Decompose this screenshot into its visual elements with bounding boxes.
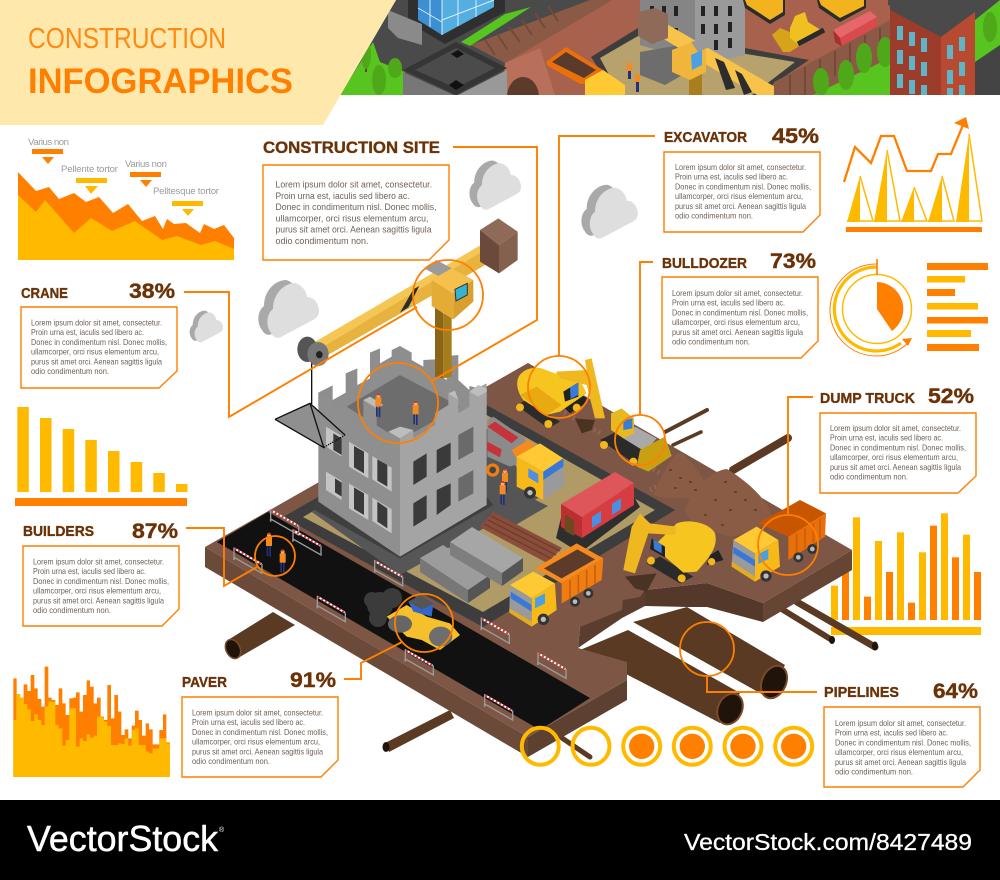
panel: crane: odio condimentum non. [31, 367, 109, 376]
panel: bulldozer [662, 250, 818, 358]
area chart top left: Varius non [28, 137, 69, 148]
panel: builders: Proin urna est, iaculis sed libero ac. [33, 567, 146, 576]
road [217, 512, 590, 730]
header banner [0, 0, 396, 125]
area chart top left: Pelltesque tortor [153, 186, 220, 197]
barricades [234, 509, 566, 720]
panel: paver: Proin urna est, iaculis sed libero ac. [192, 718, 305, 727]
panel: construction site: CONSTRUCTION SITE [263, 139, 440, 157]
footer bar: ® [219, 826, 225, 834]
isometric construction site [205, 218, 878, 757]
target rings row [522, 728, 812, 765]
panel: construction site: ullamcorper, orci risus elementum arcu, [276, 213, 428, 224]
panel: pipelines: Proin urna est, iaculis sed libero ac. [835, 729, 948, 738]
leader lines and highlight circles [184, 136, 818, 692]
panel: dump truck: Lorem ipsum dolor sit amet, consectetur. [830, 424, 961, 433]
panel: bulldozer: Donec in condimentum nisl. Donec mollis, [672, 308, 808, 317]
site ground [283, 395, 675, 627]
panel: dump truck: ullamcorper, orci risus elementum arcu, [830, 453, 958, 462]
panel: excavator: Donec in condimentum nisl. Donec mollis, [675, 182, 811, 191]
cloud 1 [258, 280, 319, 338]
panel: builders: Donec in condimentum nisl. Donec mollis, [33, 577, 169, 586]
concrete slabs and pipes stack [420, 512, 562, 603]
title: CONSTRUCTION [28, 23, 226, 55]
panel: pipelines [824, 680, 980, 787]
panel: bulldozer: purus sit amet orci. Aenean sagittis ligula [672, 328, 803, 337]
mixer truck [486, 417, 565, 505]
panel: paver [182, 669, 338, 777]
panel: paver: ullamcorper, orci risus elementum arcu, [192, 738, 320, 747]
footer bar: VectorStock [27, 818, 219, 859]
dump truck loaded [509, 543, 603, 627]
panel: excavator: purus sit amet orci. Aenean sagittis ligula [675, 202, 806, 211]
cloud 2 [190, 311, 223, 342]
panel: construction site: Lorem ipsum dolor sit amet, consectetur. [276, 180, 432, 190]
radial gauge chart [830, 259, 912, 356]
platform sides [205, 547, 852, 757]
soil mounds [653, 453, 773, 536]
panel: paver: odio condimentum non. [192, 757, 270, 766]
dump truck empty [732, 500, 826, 582]
panel: construction site: Donec in condimentum nisl. Donec mollis, [276, 202, 436, 213]
building [312, 346, 493, 558]
red site cabin [556, 472, 640, 553]
panel: excavator: EXCAVATOR [664, 130, 747, 146]
panel: crane [21, 280, 177, 388]
panel: excavator: 45% [772, 125, 819, 148]
bar chart descending [15, 407, 188, 506]
panel: builders: Lorem ipsum dolor sit amet, consectetur. [33, 558, 164, 566]
panel: dump truck: odio condimentum non. [830, 472, 908, 482]
panel: crane: Proin urna est, iaculis sed libero ac. [31, 328, 144, 337]
panel: excavator: Lorem ipsum dolor sit amet, consectetur. [675, 163, 806, 172]
panel: dump truck: 52% [928, 385, 974, 408]
platform top [205, 363, 852, 737]
pipes behind platform [222, 410, 878, 757]
panel: bulldozer: Lorem ipsum dolor sit amet, consectetur. [672, 289, 803, 298]
horizontal bars [927, 263, 988, 351]
panel: crane: Donec in condimentum nisl. Donec mollis, [31, 338, 167, 347]
panel: bulldozer: 73% [770, 250, 816, 273]
panel: bulldozer: Proin urna est, iaculis sed libero ac. [672, 299, 785, 308]
panel: bulldozer: BULLDOZER [662, 256, 747, 272]
panel: builders: ullamcorper, orci risus elementum arcu, [33, 587, 161, 596]
cloud 4 [581, 185, 638, 239]
area chart top left: Varius non [125, 159, 167, 170]
excavator 2 [623, 513, 723, 592]
panel: construction site: odio condimentum non. [276, 236, 368, 247]
panel: paver: 91% [290, 669, 336, 692]
cloud 3 [469, 161, 521, 210]
title: INFOGRAPHICS [28, 62, 293, 101]
panel: pipelines: purus sit amet orci. Aenean sagittis ligula [835, 758, 966, 767]
panel: paver: purus sit amet orci. Aenean sagittis ligula [192, 747, 323, 756]
area chart top left: Pellente tortor [61, 164, 119, 175]
footer bar [0, 800, 1000, 880]
panel: builders: 87% [132, 520, 178, 543]
line and peaks chart top right [844, 117, 982, 232]
panel: excavator [664, 125, 820, 232]
area chart top left [18, 137, 234, 260]
paver roller [266, 533, 460, 650]
footer bar: VectorStock.com/8427489 [684, 829, 972, 855]
panel: excavator: odio condimentum non. [675, 212, 753, 220]
crane [275, 218, 518, 448]
panel: pipelines: PIPELINES [824, 685, 899, 701]
panel: paver: PAVER [182, 675, 227, 691]
panel: dump truck: Donec in condimentum nisl. Donec mollis, [830, 443, 966, 452]
panel: dump truck: purus sit amet orci. Aenean sagittis ligula [830, 463, 961, 472]
header scene: isometric city [340, 0, 1000, 95]
panel: builders [23, 520, 179, 626]
panel: builders: BUILDERS [23, 524, 94, 540]
panel: pipelines: 64% [933, 680, 978, 703]
road smoke [364, 588, 402, 627]
panel: pipelines: Donec in condimentum nisl. Donec mollis, [835, 738, 971, 747]
panel: excavator: ullamcorper, orci risus elementum arcu, [675, 192, 803, 201]
title [28, 23, 293, 101]
panel: excavator: Proin urna est, iaculis sed libero ac. [675, 173, 788, 182]
panel: bulldozer: ullamcorper, orci risus elementum arcu, [672, 318, 800, 327]
panel: builders: purus sit amet orci. Aenean sagittis ligula [33, 596, 164, 605]
panel: crane: CRANE [21, 286, 68, 302]
column chart right [831, 513, 981, 635]
panel: dump truck: DUMP TRUCK [820, 391, 916, 407]
panel: crane: Lorem ipsum dolor sit amet, consectetur. [31, 318, 162, 328]
panel: pipelines: odio condimentum non. [835, 768, 913, 776]
panel: pipelines: ullamcorper, orci risus elementum arcu, [835, 748, 963, 757]
panel: paver: Lorem ipsum dolor sit amet, consectetur. [192, 708, 323, 718]
panel: dump truck [820, 385, 976, 493]
panel: dump truck: Proin urna est, iaculis sed libero ac. [830, 434, 943, 443]
panel: paver: Donec in condimentum nisl. Donec mollis, [192, 728, 328, 737]
panel: construction site: purus sit amet orci. Aenean sagittis ligula [276, 225, 432, 236]
panel: builders: odio condimentum non. [33, 606, 111, 615]
excavator 1 [516, 358, 605, 433]
panel: bulldozer: odio condimentum non. [672, 338, 750, 346]
panel: crane: 38% [129, 280, 175, 303]
panel: construction site: Proin urna est, iaculis sed libero ac. [276, 191, 410, 202]
bulldozer [600, 408, 672, 472]
panel: pipelines: Lorem ipsum dolor sit amet, consectetur. [835, 719, 966, 728]
jagged area chart bottom left [13, 667, 170, 777]
panel: crane: ullamcorper, orci risus elementum arcu, [31, 348, 159, 357]
panel: crane: purus sit amet orci. Aenean sagittis ligula [31, 357, 162, 366]
panel: construction site [263, 139, 449, 260]
